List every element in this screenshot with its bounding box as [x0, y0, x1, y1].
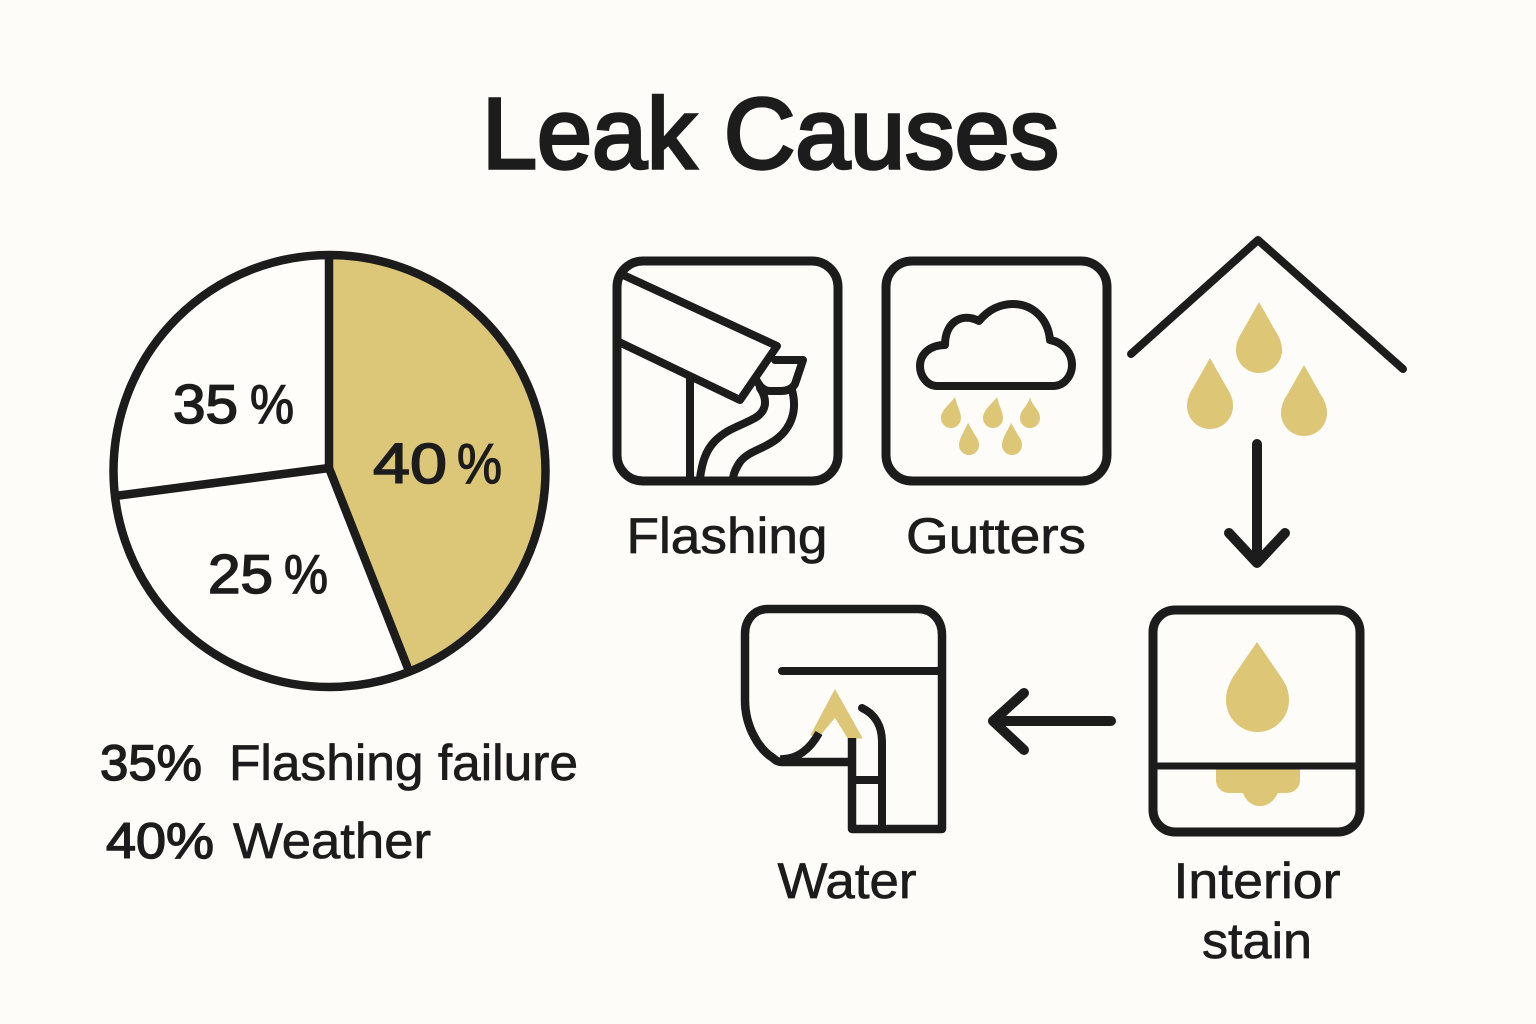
icon: flashing — [617, 261, 838, 481]
pie label: 40 percent — [373, 432, 502, 496]
pie outline — [114, 255, 546, 687]
label: water: Water — [778, 853, 916, 909]
pie divider lines — [115, 255, 409, 671]
legend row: weather: Weather — [233, 813, 431, 869]
arrow: left — [993, 693, 1111, 750]
pie label: 25 percent — [208, 543, 328, 605]
pie label: 25 percent: 25 — [208, 543, 273, 605]
pie label: 25 percent: % — [284, 543, 328, 605]
pie slice: 40 percent — [330, 255, 545, 672]
icon: interior stain — [1153, 610, 1360, 832]
pie chart — [114, 255, 546, 687]
pie label: 40 percent: 40 — [373, 432, 447, 496]
label: interior stain: stain — [1202, 913, 1312, 969]
title: Leak Causes — [482, 78, 1059, 190]
pie label: 35 percent: 35 — [173, 373, 238, 435]
icon: gutters — [886, 261, 1107, 481]
cloud — [920, 304, 1072, 386]
rain drops — [941, 397, 1040, 455]
label: interior stain: Interior — [1174, 853, 1340, 909]
icon: roof with drips — [1131, 240, 1403, 436]
label: interior stain — [1174, 853, 1340, 969]
label: flashing: Flashing — [626, 508, 828, 564]
label: gutters: Gutters — [906, 508, 1086, 564]
pie label: 40 percent: % — [457, 432, 502, 496]
icon: water — [745, 609, 942, 829]
pie label: 35 percent — [173, 373, 294, 435]
arrow: down — [1229, 444, 1285, 563]
legend row: flashing failure: 35% — [100, 735, 202, 791]
legend row: flashing failure: Flashing failure — [229, 735, 578, 791]
pie label: 35 percent: % — [250, 373, 294, 435]
legend row: weather — [106, 813, 431, 869]
legend row: weather: 40% — [106, 813, 214, 869]
pie base — [114, 255, 546, 687]
